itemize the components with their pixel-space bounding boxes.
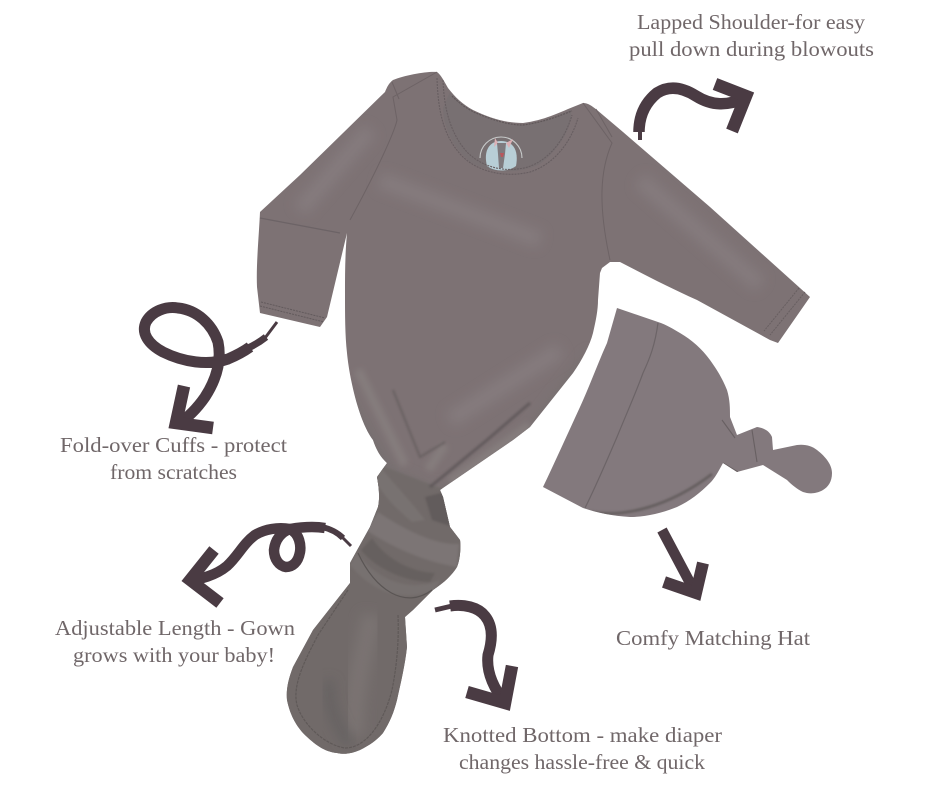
text: knotted bottom: Knotted Bottom - make diaper xyxy=(443,723,722,747)
arrow: fold-over cuffs xyxy=(144,308,277,428)
text: fold-over cuffs: Fold-over Cuffs - protect xyxy=(60,433,287,457)
brand logo xyxy=(480,137,522,170)
hat knot folds xyxy=(722,420,757,472)
text: knotted bottom xyxy=(443,723,722,774)
hat band seam xyxy=(585,323,658,508)
arrow: knotted bottom xyxy=(435,605,512,704)
arrow: adjustable length xyxy=(188,527,351,603)
hat xyxy=(543,308,832,517)
lapped shoulder seams xyxy=(350,72,612,260)
text: adjustable length: grows with your baby! xyxy=(73,643,275,667)
light folds on chest and sleeves xyxy=(300,130,760,420)
knot and foot tone xyxy=(286,466,460,754)
text: adjustable length: Adjustable Length - Gown xyxy=(55,616,296,640)
text: knotted bottom: changes hassle-free & quick xyxy=(459,750,706,774)
foot highlight and stitching xyxy=(354,615,372,735)
lower gown gather shading xyxy=(354,355,584,560)
arrow: matching hat xyxy=(662,530,703,594)
text: matching hat: Comfy Matching Hat xyxy=(616,626,810,650)
text: adjustable length xyxy=(55,616,296,667)
neck interior xyxy=(443,92,571,171)
gown shading xyxy=(280,130,760,760)
neck binding stitching xyxy=(452,96,572,125)
text: fold-over cuffs: from scratches xyxy=(110,460,237,484)
text: lapped shoulder xyxy=(629,10,874,61)
text: fold-over cuffs xyxy=(60,433,287,484)
hat shading xyxy=(590,474,712,513)
right cuff stitching xyxy=(764,288,805,335)
gown xyxy=(257,72,810,760)
left cuff fold xyxy=(260,218,340,233)
knot bands xyxy=(366,512,459,567)
gown silhouette xyxy=(257,72,810,754)
soft folds above knot xyxy=(358,370,530,482)
text: lapped shoulder: pull down during blowouts xyxy=(629,37,874,61)
text: lapped shoulder: Lapped Shoulder-for easy xyxy=(637,10,866,34)
arrow: lapped shoulder xyxy=(639,84,746,140)
hat silhouette xyxy=(543,308,832,517)
